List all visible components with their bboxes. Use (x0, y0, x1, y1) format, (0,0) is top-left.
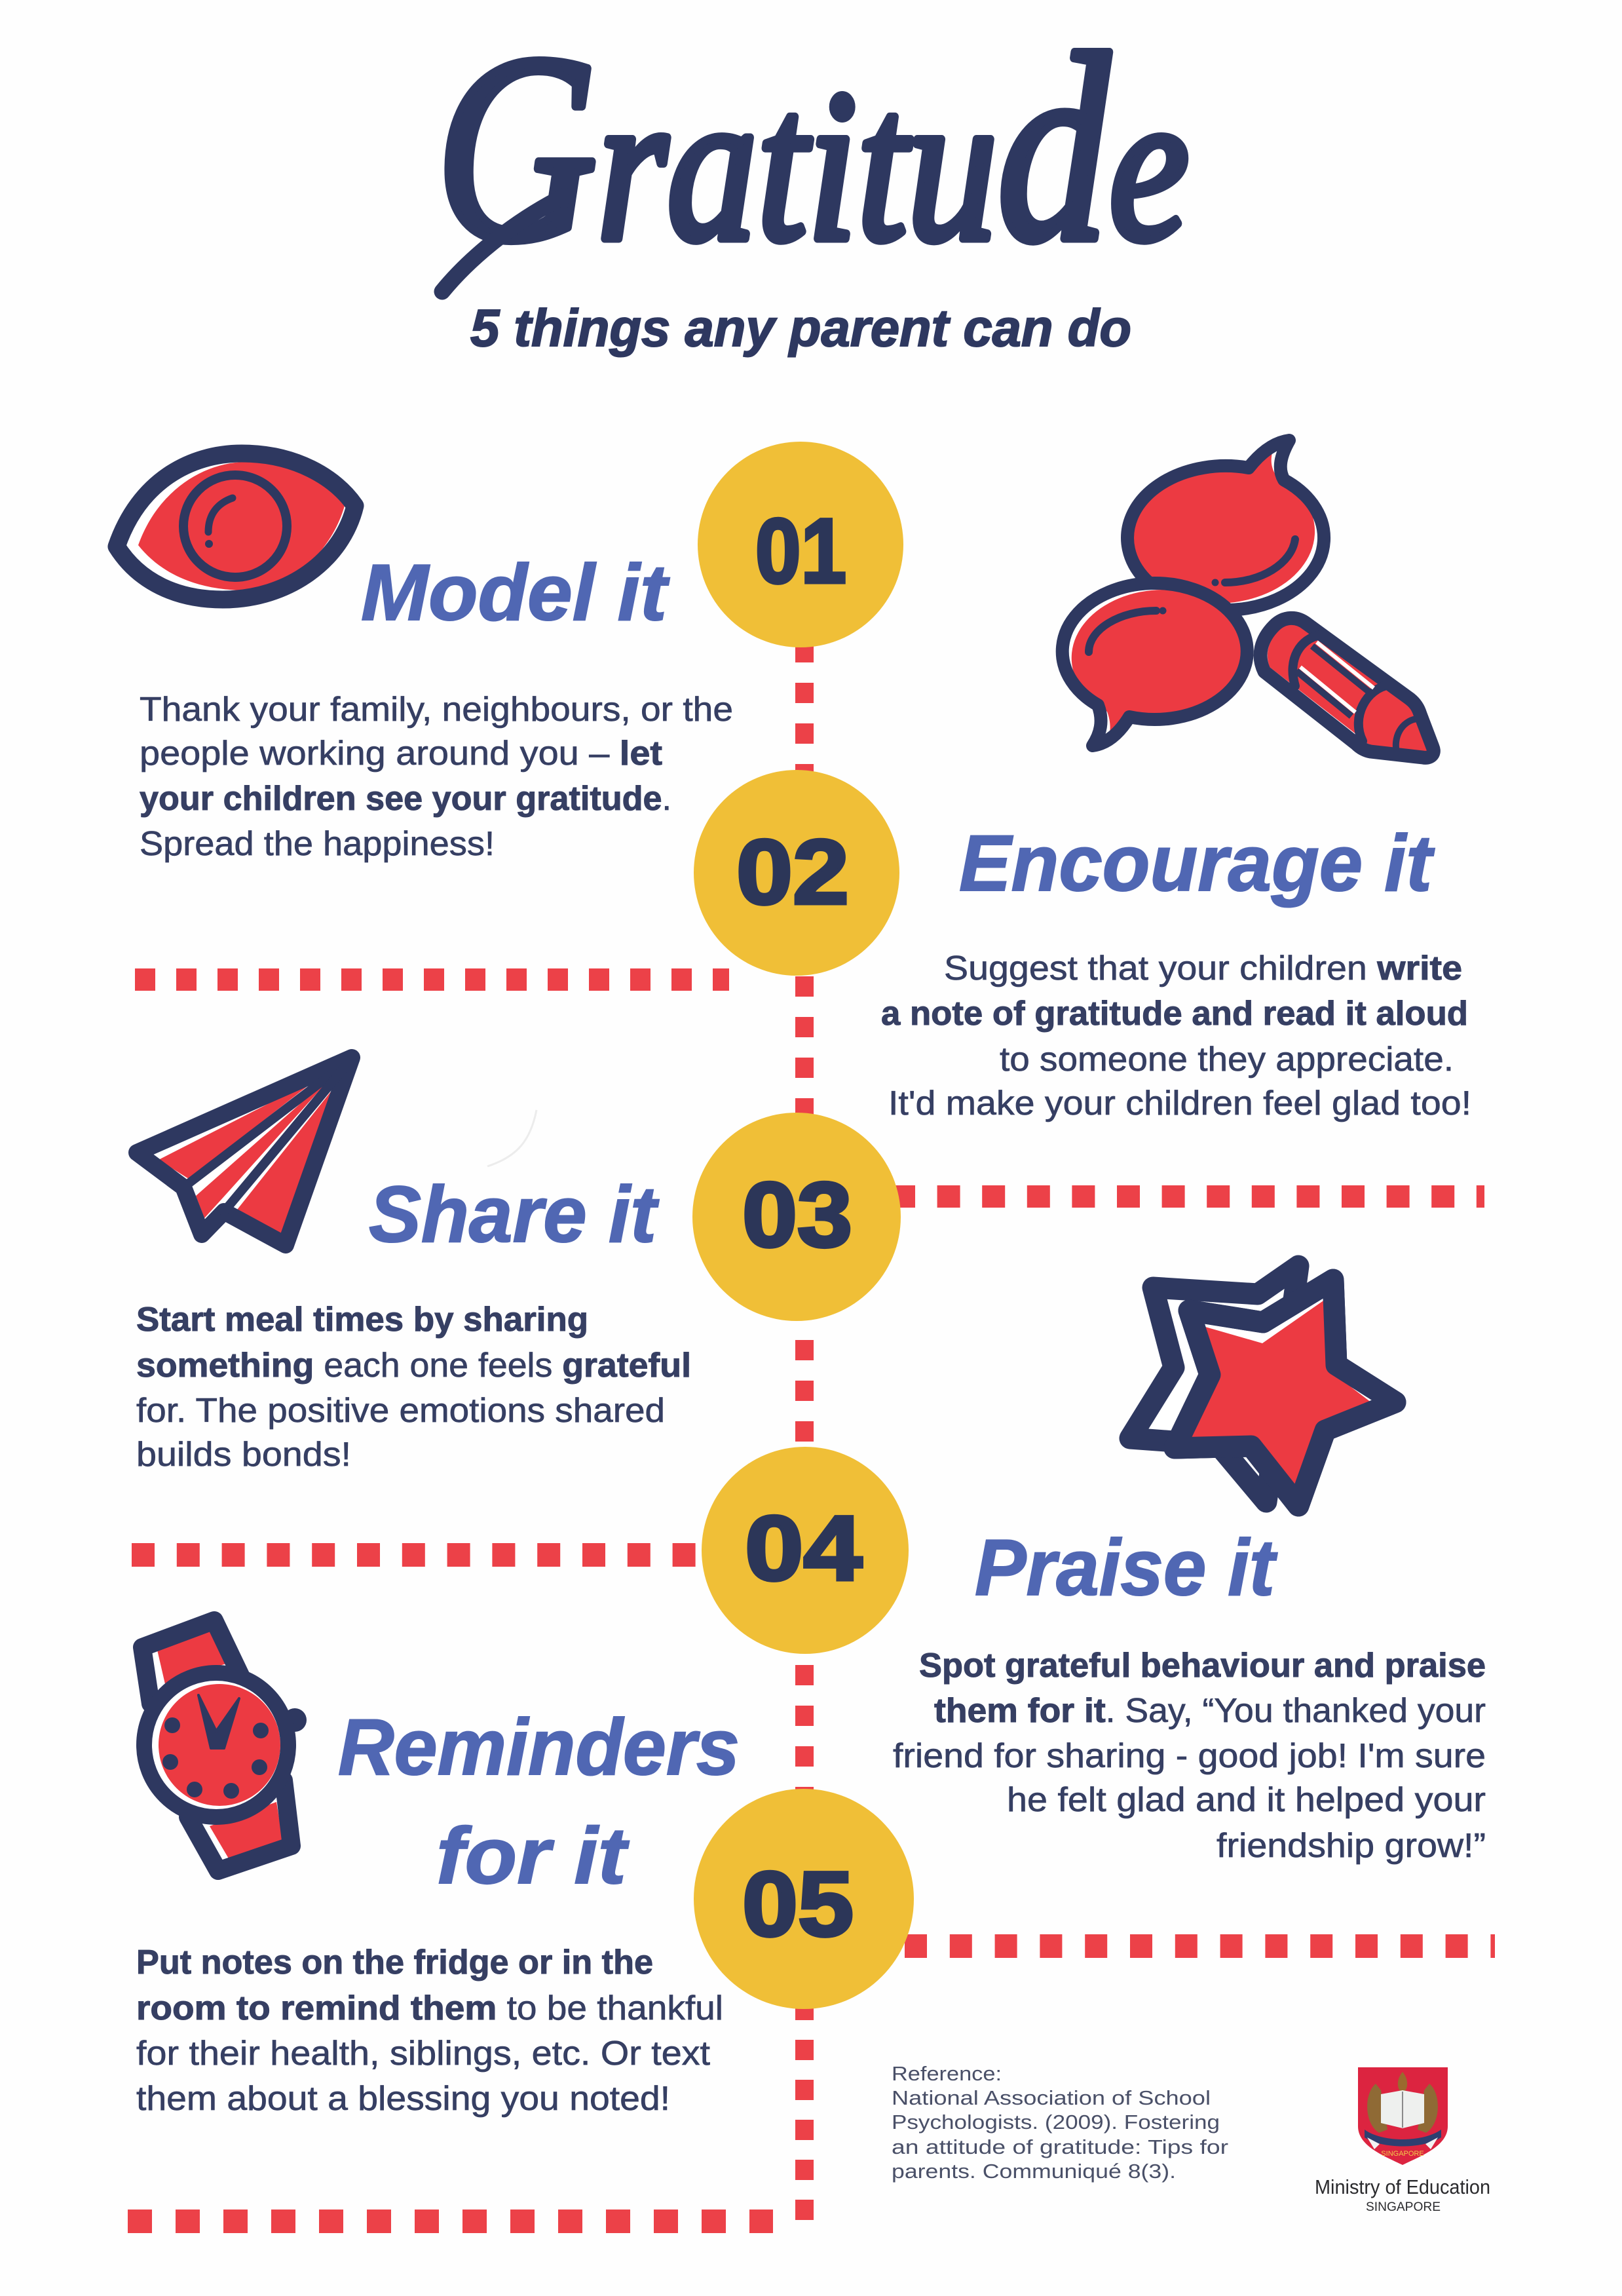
icon: speech bubbles and pencil (1063, 434, 1433, 757)
logo label: SINGAPORE (1366, 2200, 1441, 2214)
number badge 01 (698, 442, 903, 647)
logo label (1315, 2175, 1490, 2214)
dashed timeline connectors (128, 642, 1495, 2223)
panel: encourage it (881, 434, 1471, 1122)
icon: wristwatch (142, 1620, 307, 1871)
body text: encourage it: to someone they appreciate. (1000, 1041, 1454, 1079)
icon: eye (117, 453, 355, 600)
number badge 03: 03 (742, 1163, 852, 1266)
number badge 04: 04 (745, 1497, 862, 1599)
body text: encourage it (881, 949, 1471, 1122)
body text: reminders: for their health, siblings, etc. Or text (136, 2035, 711, 2073)
body text: share it: Start meal times by sharing (136, 1301, 588, 1339)
body text: share it: builds bonds! (136, 1436, 351, 1474)
number badge 02: 02 (736, 820, 849, 923)
body text: praise it (893, 1647, 1486, 1865)
heading: Share it: Share it (369, 1170, 659, 1259)
body text: praise it: friend for sharing - good job! I'm sure (893, 1737, 1486, 1775)
body text: model it: your children see your gratitude. (140, 780, 671, 818)
body text: share it (136, 1301, 691, 1474)
number badge 03 (692, 1113, 901, 1321)
body text: encourage it: It'd make your children feel glad too! (888, 1084, 1471, 1122)
panel: model it (117, 453, 733, 863)
reference text: Reference: (892, 2062, 1002, 2085)
panel: praise it (893, 1266, 1486, 1865)
logo: Ministry of Education crest: SINGAPORE (1381, 2150, 1424, 2158)
number badge 05: 05 (742, 1852, 854, 1955)
body text: reminders: Put notes on the fridge or in the (136, 1943, 653, 1981)
body text: reminders: room to remind them to be thankful (136, 1989, 723, 2027)
heading: Reminders for it: Reminders (338, 1702, 740, 1791)
heading: Reminders for it (338, 1702, 740, 1900)
number badge 02 (694, 770, 899, 976)
body text: encourage it: Suggest that your children write (944, 949, 1462, 987)
reference text: parents. Communiqué 8(3). (892, 2160, 1176, 2183)
number badge 05 (694, 1789, 914, 2009)
heading: Encourage it: Encourage it (959, 818, 1435, 908)
subtitle: 5 things any parent can do (470, 299, 1131, 357)
body text: praise it: Spot grateful behaviour and praise (919, 1647, 1486, 1685)
body text: praise it: he felt glad and it helped your (1007, 1781, 1486, 1819)
heading: Reminders for it: for it (436, 1811, 630, 1900)
heading: Praise it: Praise it (975, 1523, 1277, 1612)
reference text: National Association of School (892, 2086, 1211, 2109)
heading: Model it: Model it (361, 548, 670, 637)
number badge 01: 01 (755, 499, 846, 602)
body text: model it: Thank your family, neighbours, or the (140, 691, 733, 729)
body text: reminders: them about a blessing you noted! (136, 2080, 670, 2118)
icon: star (1130, 1266, 1395, 1506)
body text: model it: people working around you – let (140, 735, 662, 773)
body text: encourage it: a note of gratitude and read it aloud (881, 995, 1468, 1033)
reference text: an attitude of gratitude: Tips for (892, 2135, 1228, 2158)
body text: share it: for. The positive emotions shared (136, 1392, 665, 1430)
body text: praise it: them for it. Say, “You thanked your (934, 1692, 1486, 1730)
body text: reminders (136, 1943, 723, 2118)
body text: model it (140, 691, 733, 863)
logo label: Ministry of Education (1315, 2175, 1490, 2198)
icon: paper plane (137, 1058, 352, 1245)
logo: Ministry of Education crest (1358, 2067, 1448, 2165)
title: Gratitude (436, 0, 1189, 297)
panel: share it (136, 1058, 691, 1474)
reference text: Psychologists. (2009). Fostering (892, 2111, 1220, 2133)
reference text (892, 2062, 1228, 2183)
panel: reminders for it (136, 1620, 740, 2118)
body text: praise it: friendship grow!” (1216, 1827, 1486, 1865)
body text: model it: Spread the happiness! (140, 825, 495, 863)
number badge 04 (702, 1447, 909, 1654)
body text: share it: something each one feels grateful (136, 1347, 691, 1385)
